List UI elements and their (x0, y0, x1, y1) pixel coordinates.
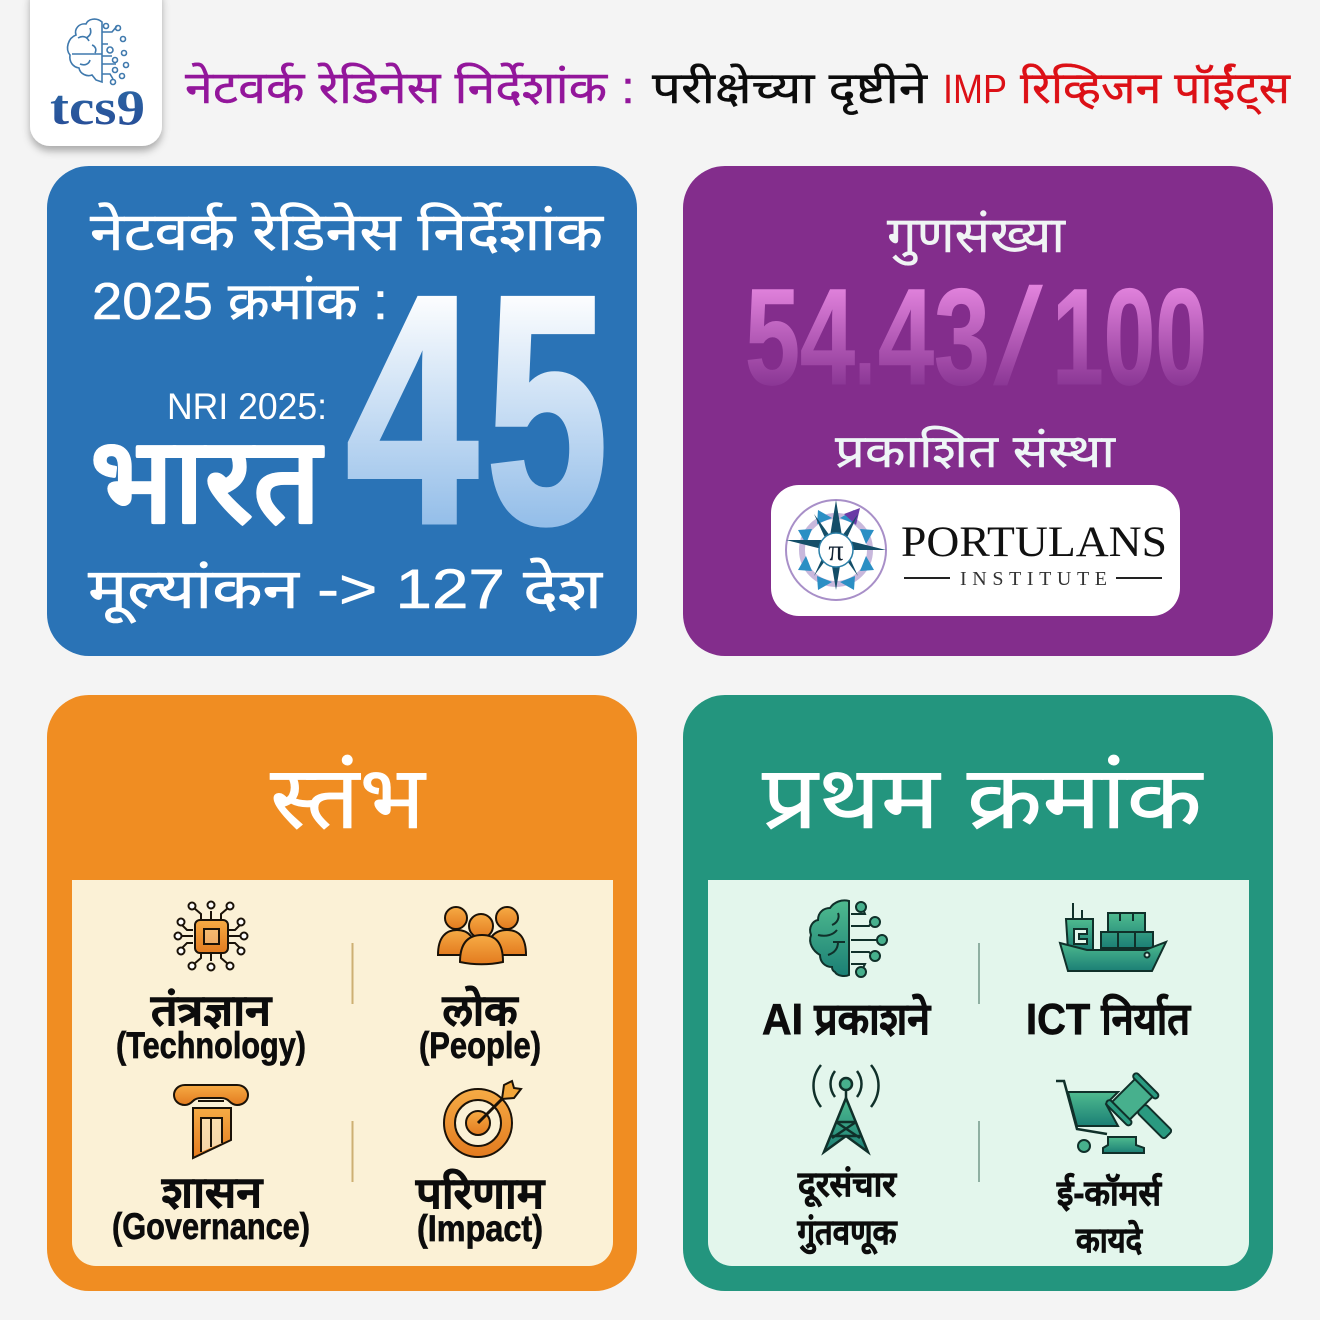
icon: target (444, 1081, 521, 1157)
icon: ship (1060, 903, 1166, 971)
pillar: people (419, 907, 541, 1066)
publisher name: PORTULANS (901, 519, 1167, 566)
logo card (30, 0, 162, 146)
pillar: governance (112, 1085, 310, 1247)
rank label: 2025 क्रमांक : (92, 273, 388, 331)
country name: भारत (90, 414, 325, 548)
item: telecom investment (797, 1065, 898, 1255)
sublabel: (People) (419, 1025, 541, 1066)
label: ICT निर्यात (1026, 993, 1192, 1044)
icon: column (174, 1085, 248, 1158)
label line two: कायदे (1075, 1220, 1143, 1260)
item: e-commerce law (1056, 1072, 1184, 1260)
publisher heading: प्रकाशित संस्था (835, 425, 1116, 477)
NRI label: NRI 2025: (167, 386, 327, 427)
score value: / (993, 261, 1044, 414)
title part: IMP: IMP (943, 66, 1007, 112)
sublabel: (Impact) (417, 1208, 543, 1249)
label: शासन (161, 1169, 264, 1217)
big number 45: 5 (486, 228, 608, 591)
item: ICT exports (1026, 903, 1192, 1044)
publisher logo (771, 485, 1180, 616)
coverage line: मूल्यांकन -> 127 देश (88, 557, 604, 624)
panel: first rank (683, 695, 1273, 1291)
label: दूरसंचार (797, 1165, 898, 1208)
panel: score (683, 166, 1273, 656)
label: परिणाम (415, 1168, 545, 1218)
first rank heading: प्रथम क्रमांक (762, 748, 1204, 847)
score value: . (855, 261, 875, 414)
sublabel: (Governance) (112, 1206, 310, 1247)
title (185, 62, 1291, 115)
label line two: गुंतवणूक (797, 1213, 897, 1255)
panel heading: नेटवर्क रेडिनेस निर्देशांक (90, 202, 604, 262)
score value: 100 (1052, 261, 1207, 414)
title part: index name: नेटवर्क रेडिनेस निर्देशांक : (185, 62, 635, 113)
icon: AI brain (810, 900, 887, 977)
icon: people (438, 907, 526, 964)
title part: exam view: परीक्षेच्या दृष्टीने (652, 63, 929, 115)
score heading: गुणसंख्या (887, 207, 1066, 266)
title part: revision points: रिव्हिजन पॉईंट्स (1020, 63, 1291, 115)
big number 45 (346, 228, 608, 591)
icon: cart and gavel (1056, 1072, 1184, 1153)
icon: brain circuit logo (68, 19, 128, 85)
label: लोक (441, 985, 519, 1035)
big number 45: 4 (346, 228, 480, 591)
icon: tower (814, 1065, 878, 1152)
score value (745, 261, 1207, 414)
icon: chip (174, 902, 248, 970)
label: ई-कॉमर्स (1056, 1173, 1163, 1213)
score value: 43 (878, 261, 990, 414)
label: AI प्रकाशने (762, 993, 931, 1044)
panel: pillars (47, 695, 637, 1291)
icon: compass (786, 500, 886, 600)
pillar: impact (415, 1081, 545, 1249)
icon: compass: π (828, 534, 844, 567)
publisher subtitle: INSTITUTE (960, 568, 1107, 590)
label: तंत्रज्ञान (150, 987, 273, 1035)
pillars heading: स्तंभ (270, 748, 427, 847)
pillar: technology (116, 902, 306, 1066)
item: AI publications (762, 900, 931, 1044)
logo wordmark: tcs9 (50, 79, 145, 135)
panel: rank (47, 166, 637, 656)
score value: 54 (745, 261, 855, 414)
sublabel: (Technology) (116, 1025, 306, 1066)
